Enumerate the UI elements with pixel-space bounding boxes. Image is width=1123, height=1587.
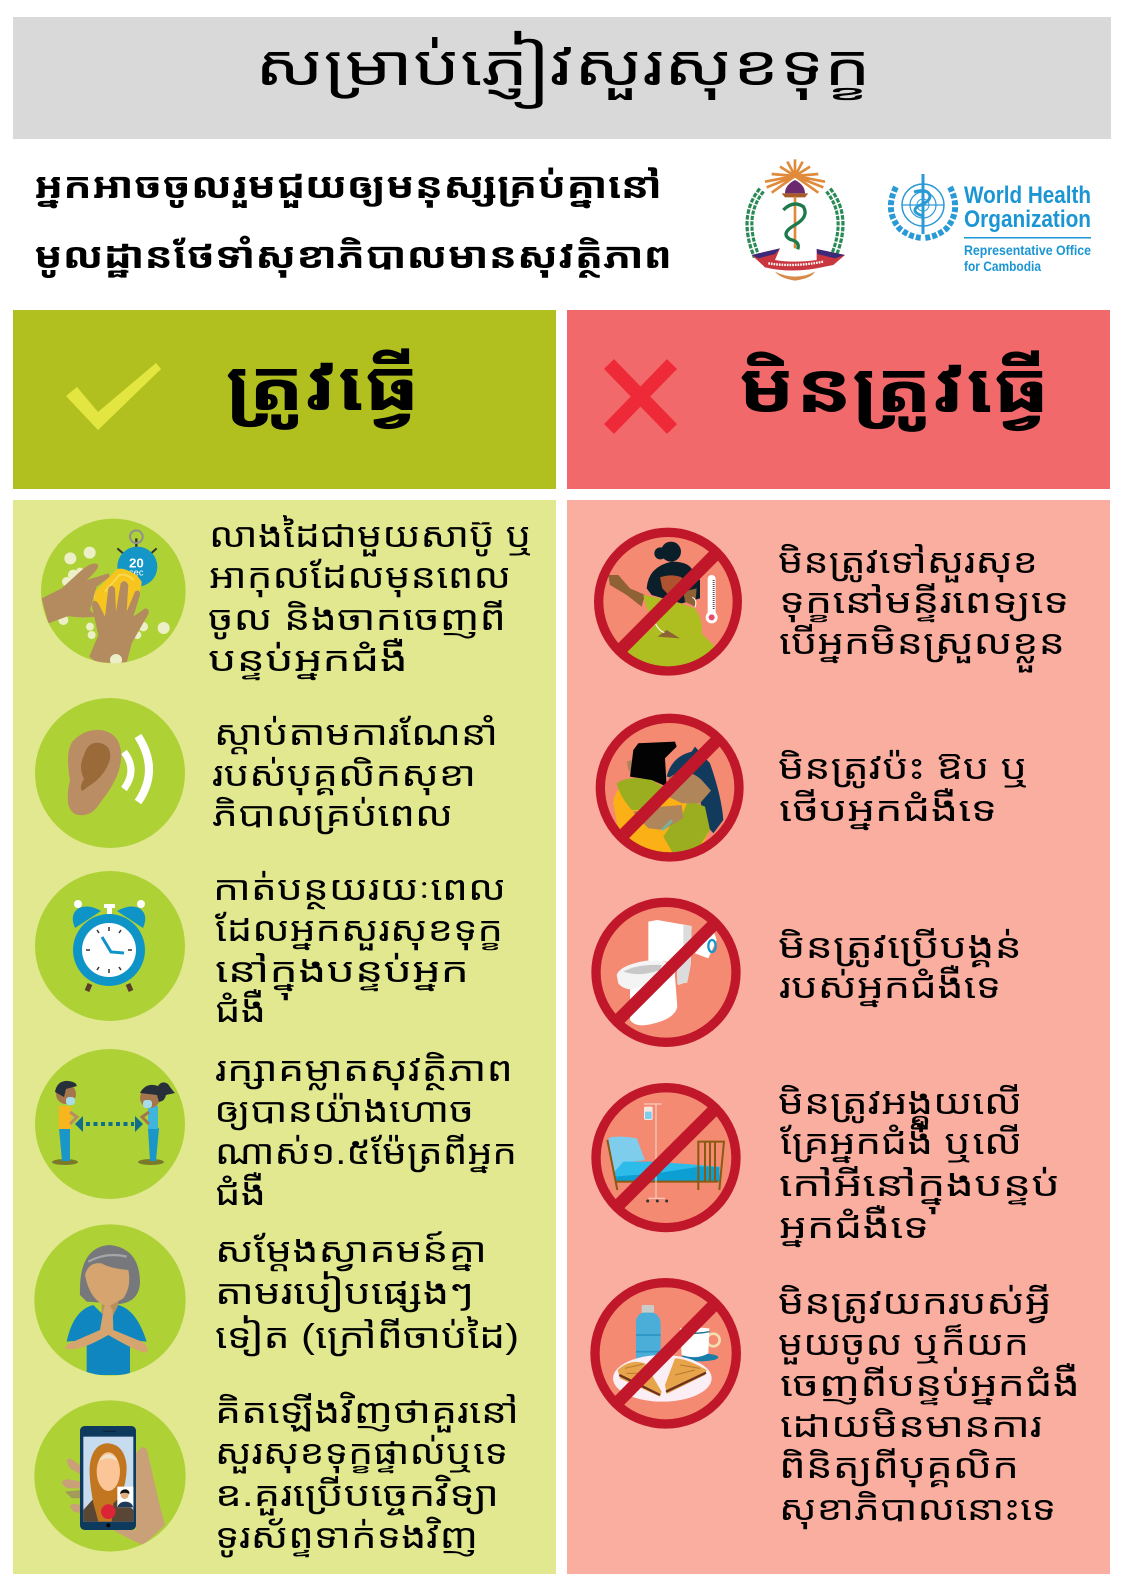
text: reconsider visit: សួរសុខទុក្ខផ្ទាល់ឬទេ xyxy=(215,1434,508,1474)
text: greet differently: ទៀត (ក្រៅពីចាប់ដៃ) xyxy=(215,1315,519,1357)
text: don't use toilet: មិនត្រូវប្រើបង្គន់ xyxy=(778,928,1022,968)
text: shorten visit: ដែលអ្នកសួរសុខទុក្ខ xyxy=(215,911,503,951)
icon: washing hands: sec xyxy=(129,568,144,578)
text: listen to staff xyxy=(212,715,498,835)
text: don't sit on bed: គ្រែអ្នកជំងឺ ឬលើ xyxy=(780,1121,1022,1164)
logo: WHO wordmark: World Health xyxy=(964,182,1091,209)
text: keep distance xyxy=(215,1051,517,1213)
text: keep distance: ជំងឺ xyxy=(215,1172,266,1213)
text: keep distance: ណាស់១.៥ម៉ែត្រពីអ្នក xyxy=(215,1134,517,1174)
panel: don't header xyxy=(567,310,1110,489)
icon: ear xyxy=(35,698,185,848)
text: listen to staff: ស្តាប់តាមការណែនាំ xyxy=(214,715,498,755)
panel: don't list background xyxy=(567,500,1110,1574)
icon: red cross xyxy=(609,364,672,429)
text: don't sit on bed: មិនត្រូវអង្គុយលើ xyxy=(778,1084,1022,1132)
icon: washing hands: 20 xyxy=(129,556,144,571)
icon: washing hands xyxy=(41,519,186,666)
text: shorten visit: ជំងឺ xyxy=(215,989,266,1030)
text: wash hands: ចូល និងចាកចេញពី xyxy=(208,600,506,639)
text: reconsider visit: គិតឡើងវិញថាគួរនៅ xyxy=(215,1392,519,1432)
text: reconsider visit: ឧ.គួរប្រើបច្ចេកវិទ្យា xyxy=(215,1475,499,1516)
text: don't visit if unwell: ទុក្ខនៅមន្ទីរពេទ្យទេ xyxy=(779,583,1069,623)
text: keep distance: ឲ្យបានយ៉ាងហោច xyxy=(215,1092,474,1131)
text: don't bring items: មួយចូល ឬក៏យក xyxy=(778,1324,1029,1364)
text: shorten visit xyxy=(213,870,506,1030)
icon: video call phone xyxy=(34,1400,186,1552)
text: listen to staff: របស់បុគ្គលិកសុខា xyxy=(212,756,476,796)
text: don't touch: ថើបអ្នកជំងឺទេ xyxy=(779,788,997,831)
text: shorten visit: កាត់បន្ថយរយៈពេល xyxy=(213,870,506,910)
icon: physical distance xyxy=(35,1049,185,1199)
text: reconsider visit xyxy=(215,1392,519,1558)
text: don't sit on bed: អ្នកជំងឺទេ xyxy=(779,1205,929,1248)
text: keep distance: រក្សាគម្លាតសុវត្ថិភាព xyxy=(215,1051,513,1091)
text: don't bring items: មិនត្រូវយករបស់អ្វី xyxy=(778,1284,1051,1324)
text: wash hands: បន្ទប់អ្នកជំងឺ xyxy=(208,638,408,681)
logo: WHO wordmark: for Cambodia xyxy=(964,258,1041,274)
text: wash hands: លាងដៃជាមួយសាប៊ូ ឬ xyxy=(209,515,533,556)
logo: Ministry of Health emblem xyxy=(749,159,845,281)
text: greet differently xyxy=(215,1231,519,1357)
icon: no visit when sick xyxy=(598,532,738,672)
text: don't visit if unwell: បើអ្នកមិនស្រួលខ្លួន xyxy=(779,624,1065,672)
text: greet differently: សម្តែងស្វាគមន៍គ្នា xyxy=(215,1231,487,1272)
subtitle text: មូលដ្ឋានថែទាំសុខាភិបាលមានសុវត្ថិភាព xyxy=(34,235,672,278)
text: don't bring items: ដោយមិនមានការ xyxy=(780,1407,1042,1445)
panel: do header: ត្រូវធ្វើ xyxy=(226,347,420,430)
logo: WHO emblem xyxy=(891,174,955,238)
text: don't bring items: ពិនិត្យពីបុគ្គលិក xyxy=(779,1448,1019,1488)
panel: do header xyxy=(13,310,556,489)
logo: WHO wordmark xyxy=(964,182,1091,274)
text: don't touch: មិនត្រូវប៉ះ ឱប ឬ xyxy=(778,749,1029,789)
text: don't bring items: សុខាភិបាលនោះទេ xyxy=(779,1490,1056,1529)
text: listen to staff: ភិបាលគ្រប់ពេល xyxy=(212,796,453,835)
text: wash hands: អាកុលដែលមុនពេល xyxy=(209,558,511,597)
subtitle text: អ្នកអាចចូលរួមជួយឲ្យមនុស្សគ្រប់គ្នានៅ xyxy=(34,165,662,209)
text: reconsider visit: ទូរស័ព្ទទាក់ទងវិញ xyxy=(215,1517,478,1558)
icon: alarm clock xyxy=(35,871,185,1021)
text: don't touch xyxy=(778,749,1029,831)
text: don't sit on bed xyxy=(778,1084,1060,1248)
logo: WHO wordmark: Representative Office xyxy=(964,242,1091,258)
icon: no hugging xyxy=(600,718,740,858)
panel: don't header: មិនត្រូវធ្វើ xyxy=(738,349,1050,432)
icon: no toilet xyxy=(596,902,736,1042)
icon: greeting woman xyxy=(34,1224,186,1376)
text: don't visit if unwell: មិនត្រូវទៅសួរសុខ xyxy=(778,543,1038,583)
text: don't bring items: ចេញពីបន្ទប់អ្នកជំងឺ xyxy=(780,1363,1080,1406)
title banner: សម្រាប់ភ្ញៀវសួរសុខទុក្ខ xyxy=(255,30,871,109)
subtitle text xyxy=(34,165,672,278)
panel: do list background xyxy=(13,500,556,1574)
text: don't use toilet: របស់អ្នកជំងឺទេ xyxy=(779,965,1001,1008)
icon: no sitting on bed xyxy=(596,1088,736,1228)
text: don't bring items xyxy=(778,1284,1080,1529)
logo: WHO wordmark: Organization xyxy=(964,206,1091,233)
icon: no food and objects xyxy=(595,1283,736,1424)
icon: check mark xyxy=(66,363,161,430)
text: don't use toilet xyxy=(778,928,1022,1008)
text: don't visit if unwell xyxy=(778,543,1069,672)
text: don't sit on bed: កៅអីនៅក្នុងបន្ទប់ xyxy=(779,1166,1060,1214)
title banner xyxy=(13,17,1111,139)
text: shorten visit: នៅក្នុងបន្ទប់អ្នក xyxy=(215,952,469,1000)
text: greet differently: តាមរបៀបផ្សេងៗ xyxy=(215,1271,474,1313)
text: wash hands xyxy=(208,515,533,681)
